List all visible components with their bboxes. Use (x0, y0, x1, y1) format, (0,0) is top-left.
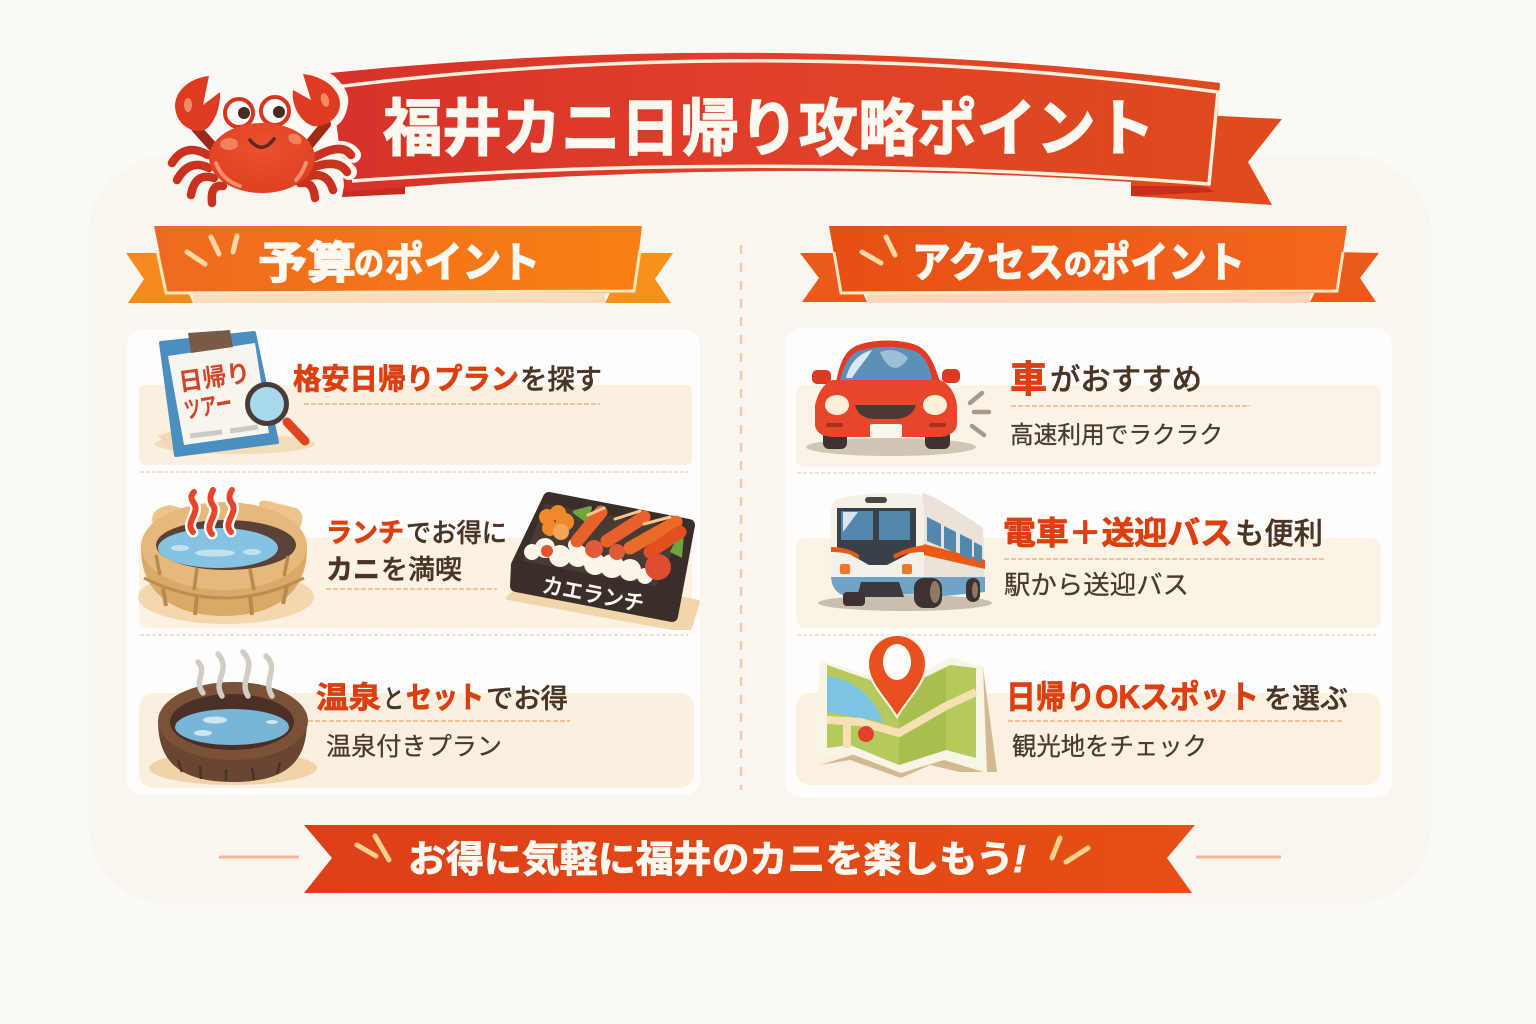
center dashed divider (740, 245, 742, 790)
section header text: アクセス (912, 239, 1064, 286)
row 1 text (1010, 359, 1250, 449)
icon: map with pin (814, 635, 997, 778)
icon: shuttle bus (818, 493, 992, 611)
closing message: ! (1013, 839, 1026, 881)
row 3 text: 観光地をチェック (1012, 733, 1207, 761)
row 2 text: ランチ (326, 518, 404, 548)
title text: 福井カニ日帰り攻略ポイント (383, 95, 1155, 164)
section header text (912, 239, 1245, 286)
row 1 text (293, 363, 602, 404)
row 2 text: 駅から送迎バス (1004, 570, 1189, 600)
row 2 text: カニ (326, 554, 380, 585)
bottom banner (219, 825, 1281, 893)
row 3 text (308, 682, 570, 761)
title banner (330, 53, 1282, 205)
row 2 text: 電車＋送迎バス (1003, 515, 1233, 551)
section header text (258, 239, 540, 288)
row 3 text: 日帰りOKスポット (1006, 679, 1259, 715)
icon: crab lunch bento (508, 498, 698, 628)
row 2 text: を満喫 (381, 555, 462, 585)
icon: clipboard and magnifier: ツアー (182, 390, 234, 425)
row 1 text: を探す (520, 364, 602, 395)
section header: budget (126, 226, 673, 303)
section header: access (800, 226, 1379, 303)
icon: clipboard and magnifier (155, 330, 315, 455)
section header text: 予算 (258, 239, 356, 288)
row 2 text (326, 518, 507, 589)
panel: access (785, 328, 1392, 797)
section header text: ポイント (1092, 239, 1245, 286)
row 3 text (1006, 679, 1348, 761)
icon: red car (806, 340, 989, 456)
row 2 text: でお得に (406, 518, 507, 548)
row 1 text: 格安日帰りプラン (293, 363, 519, 396)
row 3 text: を選ぶ (1264, 683, 1348, 714)
row 3 text: 温泉 (316, 682, 381, 715)
row 1 text: 高速利用でラクラク (1010, 422, 1223, 449)
bento label: カエランチ (540, 572, 646, 617)
row 3 text: 温泉付きプラン (326, 733, 502, 761)
background panel (88, 155, 1432, 905)
row 3 text: と (383, 684, 404, 714)
row 2 text: も便利 (1235, 518, 1323, 551)
icon: wooden tub with red steam (138, 490, 314, 624)
panel: budget (127, 329, 700, 795)
row 2 text (1003, 515, 1325, 600)
section header text: の (354, 245, 384, 282)
row 3 text: セット (406, 682, 484, 715)
crab mascot (172, 74, 353, 203)
closing message: お得に気軽に福井のカニを楽しもう (408, 839, 1014, 880)
icon: clipboard and magnifier: 日帰り (177, 359, 252, 397)
section header text: の (1064, 249, 1092, 282)
row 1 text: 車 (1010, 359, 1047, 400)
row 3 text: でお得 (486, 684, 568, 714)
icon: dark wooden bath with steam (149, 652, 317, 785)
section header text: ポイント (385, 239, 540, 286)
row 1 text: がおすすめ (1050, 364, 1202, 397)
